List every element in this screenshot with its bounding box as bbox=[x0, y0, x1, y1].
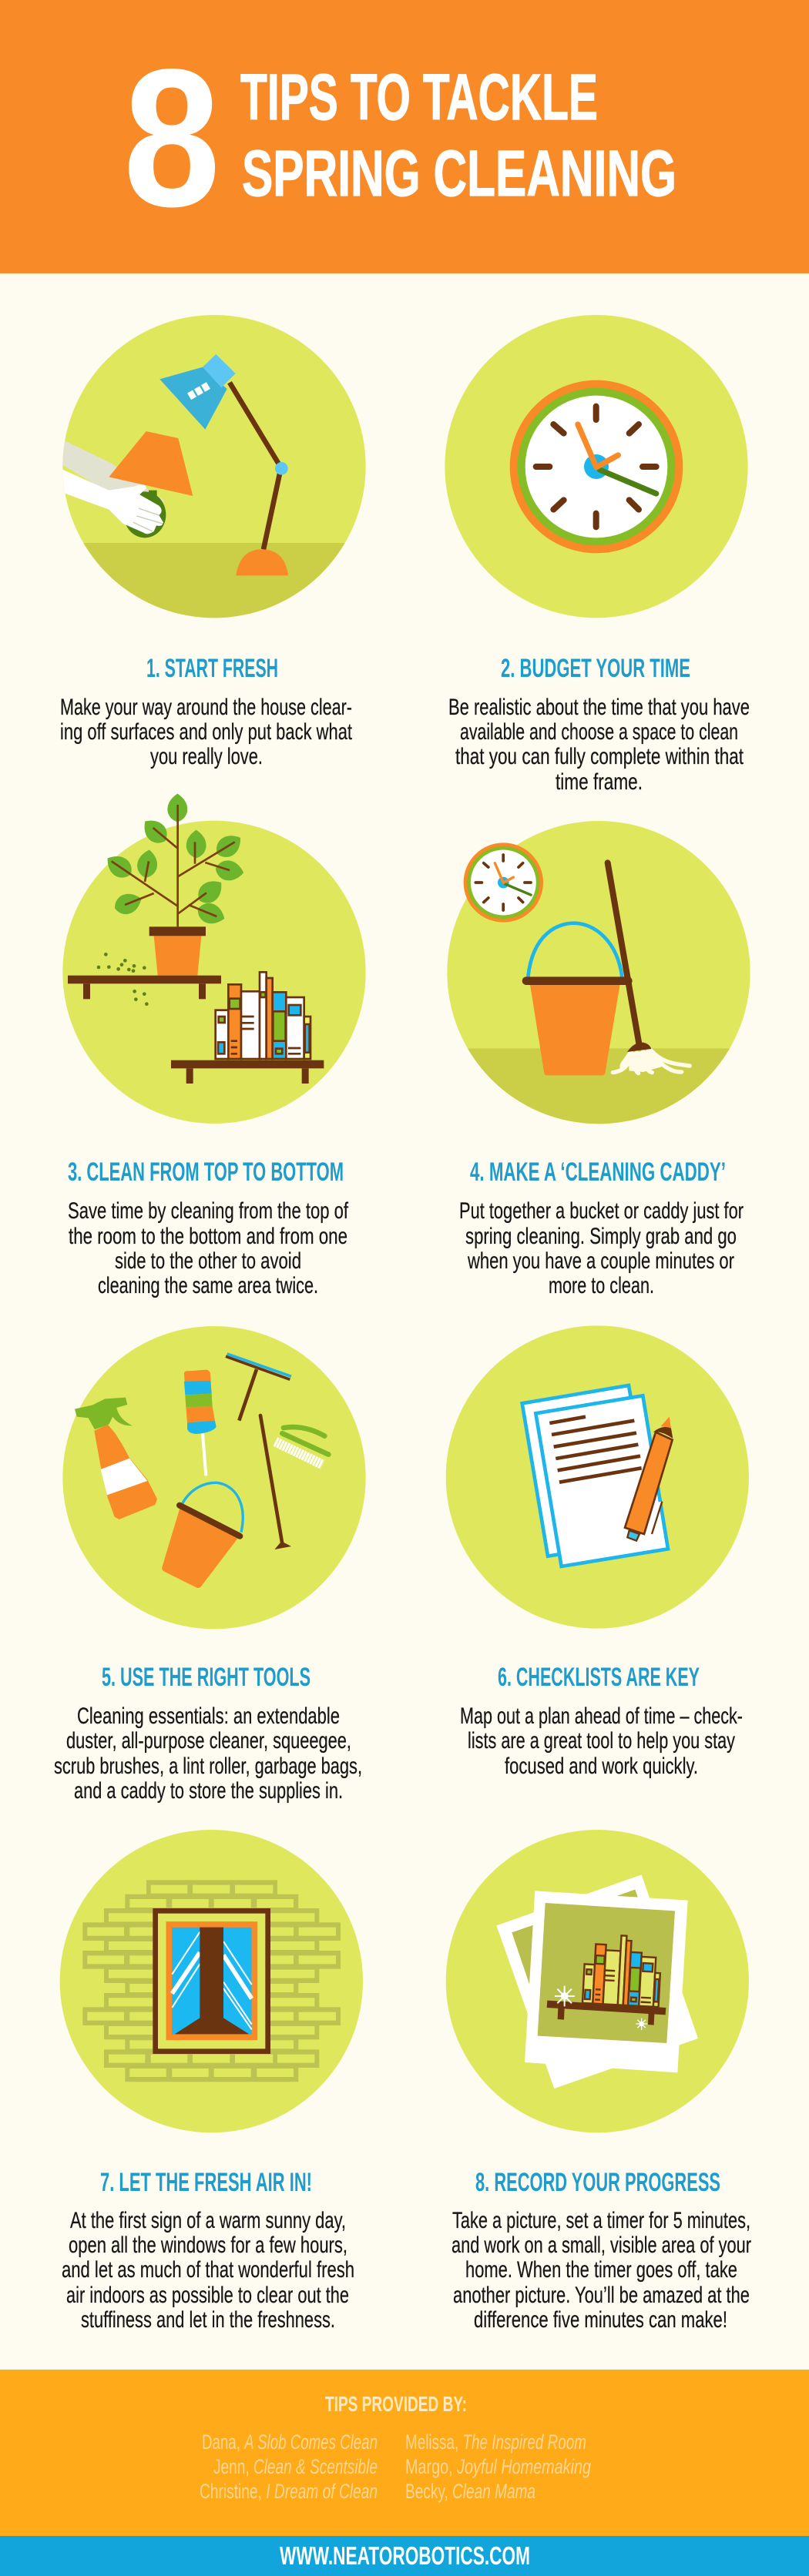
illustration: bucket, mop and clock bbox=[445, 821, 754, 1125]
illustration: cleaning tools bbox=[62, 1326, 366, 1629]
panel: tip 5 use the right tools bbox=[54, 1326, 366, 1804]
body text bbox=[62, 2208, 354, 2333]
credits left column: Dana, A Slob Comes Clean bbox=[202, 2430, 378, 2454]
icon: small wall clock bbox=[464, 842, 543, 923]
heading: 2. BUDGET YOUR TIME bbox=[501, 654, 690, 683]
body text bbox=[459, 1198, 744, 1298]
panel: tip 6 checklists are key bbox=[446, 1325, 749, 1779]
icon: duster bbox=[184, 1370, 217, 1476]
body text: ing off surfaces and only put back what bbox=[60, 719, 352, 745]
body text: open all the windows for a few hours, bbox=[69, 2233, 347, 2258]
icon: spray bottle bbox=[75, 1398, 157, 1519]
header banner bbox=[0, 0, 809, 273]
icon: squeegee bbox=[226, 1354, 291, 1421]
panel: tip 1 start fresh bbox=[60, 315, 368, 769]
credits left column: Christine, I Dream of Clean bbox=[200, 2480, 378, 2503]
panel: tip 2 budget your time bbox=[445, 315, 750, 795]
panel: tip 3 clean from top to bottom bbox=[62, 794, 366, 1298]
body text bbox=[451, 2208, 751, 2333]
body text bbox=[448, 695, 750, 795]
body text: difference five minutes can make! bbox=[474, 2307, 727, 2333]
credits right column bbox=[405, 2430, 591, 2503]
panel: tip 4 make a cleaning caddy bbox=[445, 821, 754, 1298]
credits right column: Margo, Joyful Homemaking bbox=[405, 2455, 591, 2478]
body text bbox=[54, 1703, 362, 1804]
illustration: lamps and hand bbox=[60, 315, 368, 620]
heading: 1. START FRESH bbox=[146, 654, 278, 683]
credits right column: Melissa, The Inspired Room bbox=[405, 2430, 586, 2454]
website url: WWW.NEATOROBOTICS.COM bbox=[280, 2541, 530, 2570]
heading: 5. USE THE RIGHT TOOLS bbox=[102, 1663, 311, 1692]
illustration: plant and shelves bbox=[62, 794, 366, 1124]
footer: tips provided by bbox=[0, 2370, 809, 2536]
illustration: window in brick wall bbox=[60, 1830, 363, 2132]
icon: window bbox=[156, 1911, 268, 2052]
heading: 7. LET THE FRESH AIR IN! bbox=[100, 2168, 312, 2197]
title number 8: 8 bbox=[123, 28, 220, 248]
icon: bucket bbox=[162, 1482, 243, 1588]
body text: and a caddy to store the supplies in. bbox=[74, 1778, 343, 1804]
body text: the room to the bottom and from one bbox=[69, 1224, 347, 1249]
icon: books bbox=[582, 1934, 662, 2007]
icon: sparkles bbox=[555, 1986, 647, 2030]
icon: stick bbox=[260, 1415, 291, 1549]
body text: time frame. bbox=[556, 769, 643, 795]
body text: you really love. bbox=[150, 744, 263, 769]
body text: and let as much of that wonderful fresh bbox=[62, 2257, 354, 2283]
credits heading: TIPS PROVIDED BY: bbox=[325, 2392, 467, 2416]
body text bbox=[60, 695, 352, 769]
body text: focused and work quickly. bbox=[505, 1754, 698, 1779]
body text: cleaning the same area twice. bbox=[98, 1273, 318, 1298]
illustration: clock bbox=[445, 315, 748, 618]
body text: stuffiness and let in the freshness. bbox=[81, 2307, 335, 2333]
body text: Save time by cleaning from the top of bbox=[68, 1198, 348, 1224]
body text: Cleaning essentials: an extendable bbox=[77, 1703, 340, 1729]
title line 1: TIPS TO TACKLE bbox=[240, 61, 598, 133]
credits left column bbox=[200, 2430, 378, 2503]
panel: tip 7 let the fresh air in bbox=[60, 1830, 363, 2333]
footer: website bar bbox=[0, 2536, 809, 2576]
body text: more to clean. bbox=[549, 1273, 654, 1298]
icon: scrub brush bbox=[275, 1427, 328, 1465]
body text: At the first sign of a warm sunny day, bbox=[70, 2208, 346, 2233]
illustration: checklist and pencil bbox=[446, 1325, 749, 1629]
credits right column: Becky, Clean Mama bbox=[405, 2480, 535, 2503]
body text: side to the other to avoid bbox=[115, 1248, 301, 1274]
body text: Make your way around the house clear- bbox=[60, 695, 352, 720]
heading: 3. CLEAN FROM TOP TO BOTTOM bbox=[68, 1157, 344, 1187]
credits left column: Jenn, Clean & Scentsible bbox=[213, 2455, 378, 2478]
body text bbox=[460, 1703, 743, 1779]
body text: air indoors as possible to clear out the bbox=[66, 2283, 349, 2308]
body text: scrub brushes, a lint roller, garbage bags, bbox=[54, 1754, 362, 1779]
heading: 6. CHECKLISTS ARE KEY bbox=[498, 1663, 700, 1692]
illustration: photos of bookshelf bbox=[446, 1830, 749, 2132]
body text bbox=[68, 1198, 348, 1298]
panel: tip 8 record your progress bbox=[446, 1830, 751, 2333]
body text: duster, all-purpose cleaner, squeegee, bbox=[66, 1728, 351, 1754]
